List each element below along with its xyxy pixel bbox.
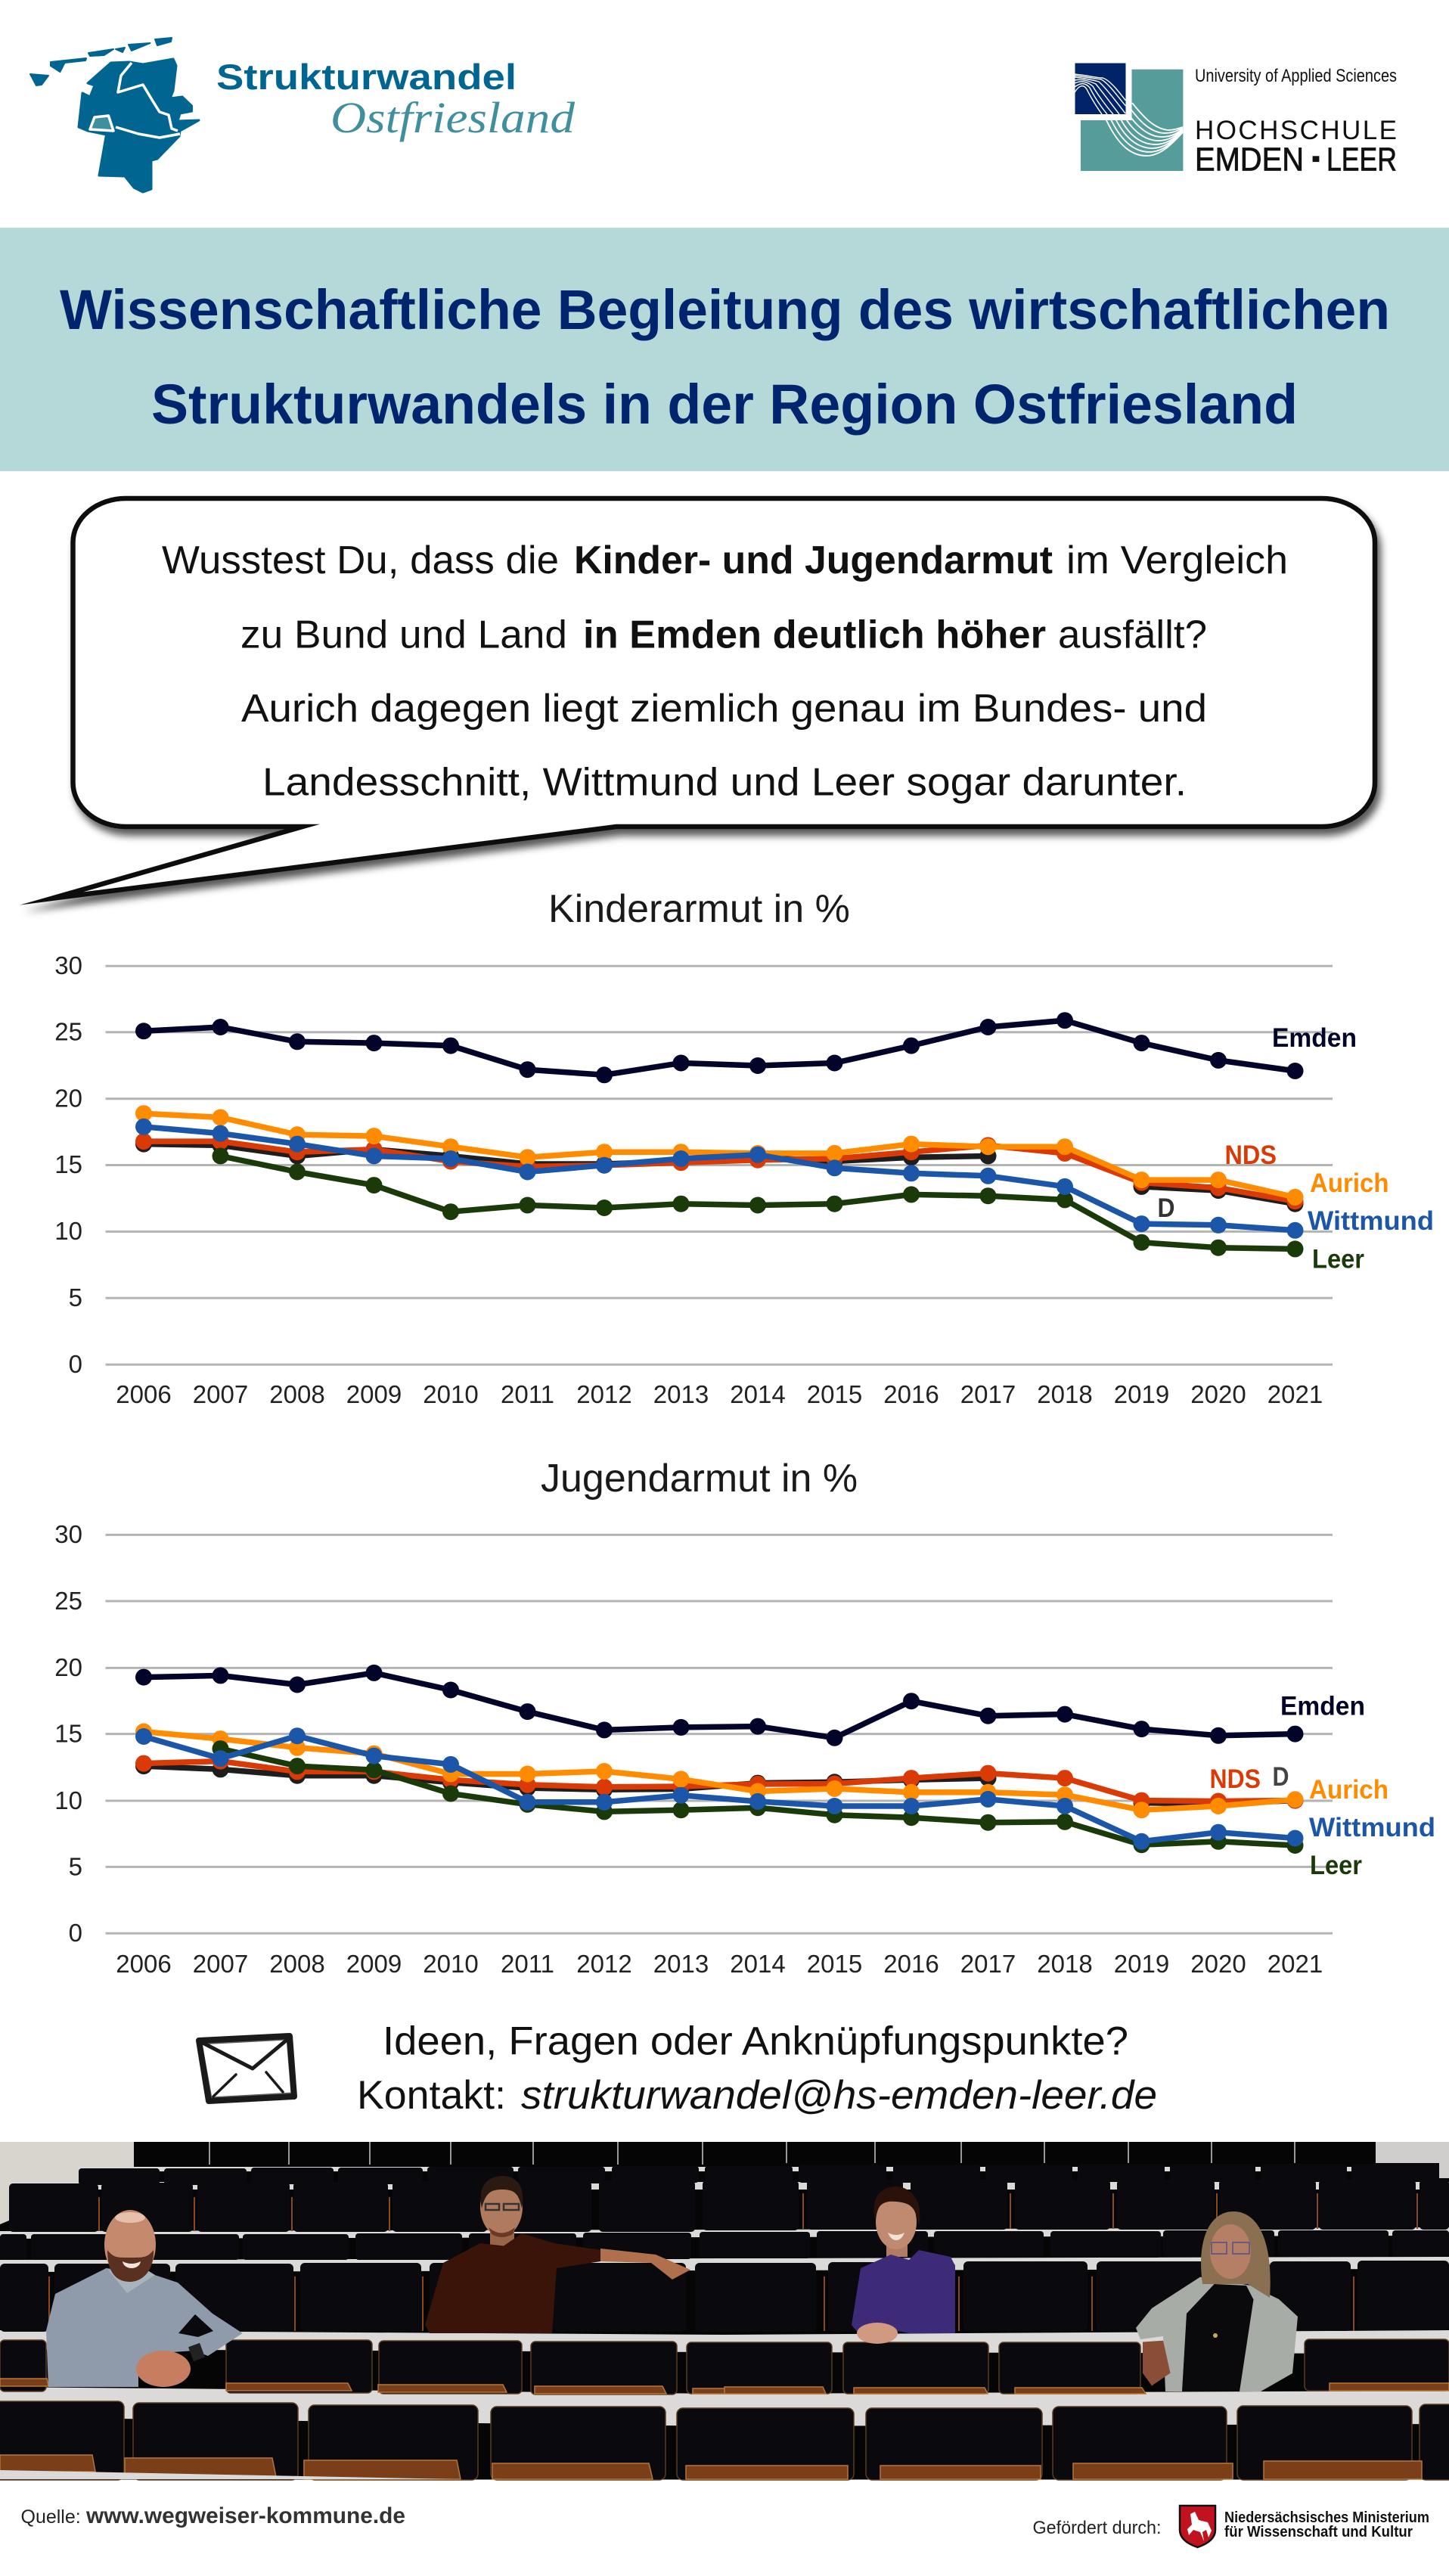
y axis labels: 15 — [54, 1720, 82, 1747]
x axis labels: 2015 — [807, 1950, 862, 1978]
logo line: Hochschule: HOCHSCHULE — [1195, 116, 1397, 145]
series labels: Wittmund — [1308, 1206, 1434, 1236]
chart title: Jugendarmut in % — [541, 1457, 858, 1501]
series labels: Wittmund — [1309, 1813, 1435, 1842]
series labels: D — [1157, 1193, 1175, 1223]
y axis labels — [54, 1520, 82, 1947]
x axis labels: 2007 — [193, 1950, 248, 1978]
y axis labels: 25 — [54, 1587, 82, 1615]
contact email: Kontakt: — [357, 2073, 506, 2118]
icon: envelope — [199, 2036, 294, 2101]
series: NDS — [144, 1761, 1295, 1802]
series labels: D — [1272, 1762, 1289, 1792]
y axis labels: 0 — [69, 1350, 82, 1378]
x axis labels: 2016 — [883, 1950, 939, 1978]
speech bubble callout — [51, 498, 1375, 898]
x axis labels: 2009 — [346, 1950, 402, 1978]
series labels: Leer — [1310, 1851, 1362, 1880]
callout text line 1: im Vergleich — [1066, 538, 1288, 582]
x axis labels — [116, 1380, 1323, 1408]
x axis labels: 2008 — [269, 1950, 325, 1978]
callout text line 1: Wusstest Du, dass die — [162, 538, 559, 582]
x axis labels: 2016 — [883, 1380, 939, 1408]
series labels: Aurich — [1310, 1169, 1388, 1198]
source note: Quelle: — [21, 2506, 81, 2528]
logo wordmark: Strukturwandel — [216, 57, 517, 97]
x axis labels: 2010 — [423, 1380, 479, 1408]
y axis labels: 30 — [54, 1520, 82, 1548]
x axis labels: 2017 — [960, 1380, 1016, 1408]
series labels: Emden — [1280, 1691, 1365, 1721]
ministry name line 2: für Wissenschaft und Kultur — [1224, 2524, 1413, 2540]
logo line: Emden-Leer — [1195, 141, 1397, 178]
y axis labels: 10 — [54, 1217, 82, 1245]
y axis labels: 5 — [69, 1283, 82, 1311]
x axis labels: 2007 — [193, 1380, 248, 1408]
callout text line 2: zu Bund und Land — [240, 613, 567, 656]
y axis labels — [54, 951, 82, 1378]
x axis labels: 2020 — [1190, 1380, 1246, 1408]
x axis labels: 2015 — [807, 1380, 862, 1408]
x axis labels: 2019 — [1114, 1380, 1169, 1408]
series: D — [144, 1144, 1295, 1204]
seats row 4 — [0, 2261, 1449, 2332]
y axis labels: 30 — [54, 951, 82, 979]
logo line: University of Applied Sciences: University of Applied Sciences — [1195, 66, 1397, 86]
x axis labels: 2021 — [1267, 1380, 1323, 1408]
icon: map of Ostfriesland — [30, 38, 199, 192]
logo line: Emden-Leer: LEER — [1326, 141, 1397, 178]
callout text line 2: in Emden deutlich höher — [583, 613, 1046, 656]
x axis labels: 2006 — [116, 1950, 172, 1978]
x axis labels: 2010 — [423, 1950, 479, 1978]
chart: Jugendarmut in % — [54, 1457, 1435, 1978]
x axis labels: 2017 — [960, 1950, 1016, 1978]
series: D — [144, 1766, 1295, 1804]
y axis labels: 0 — [69, 1919, 82, 1947]
logo line: Emden-Leer: EMDEN — [1195, 141, 1304, 178]
x axis labels: 2012 — [576, 1950, 632, 1978]
x axis labels: 2009 — [346, 1380, 402, 1408]
icon: Lower Saxony coat of arms — [1180, 2506, 1215, 2547]
person 2: man in brown sweater — [425, 2176, 690, 2333]
chart: Kinderarmut in % — [54, 887, 1434, 1408]
x axis labels: 2012 — [576, 1380, 632, 1408]
series labels — [1210, 1691, 1435, 1880]
series: Aurich — [144, 1113, 1295, 1197]
series: Emden — [144, 1020, 1295, 1075]
seats row 1 — [79, 2164, 1439, 2185]
funding label: Gefördert durch: — [1033, 2518, 1162, 2538]
callout text line 3: Aurich dagegen liegt ziemlich genau im Bundes- und — [241, 687, 1207, 731]
series labels: Emden — [1272, 1023, 1357, 1053]
source note: www.wegweiser-kommune.de — [85, 2503, 405, 2528]
x axis labels: 2013 — [653, 1950, 709, 1978]
photo: team in lecture hall — [0, 2142, 1449, 2480]
y axis labels: 20 — [54, 1085, 82, 1112]
contact email: strukturwandel@hs-emden-leer.de — [521, 2073, 1157, 2118]
x axis labels: 2006 — [116, 1380, 172, 1408]
x axis labels: 2011 — [501, 1380, 554, 1408]
x axis labels: 2014 — [730, 1950, 786, 1978]
title line 1: Wissenschaftliche Begleitung des wirtschaftlichen — [60, 278, 1390, 341]
series: Leer — [221, 1156, 1295, 1249]
series: Leer — [221, 1749, 1295, 1845]
x axis labels: 2021 — [1267, 1950, 1323, 1978]
seats row 2 — [9, 2180, 1449, 2232]
callout text line 1: Kinder- und Jugendarmut — [574, 538, 1053, 582]
x axis labels: 2013 — [653, 1380, 709, 1408]
person 1: man in grey shirt — [46, 2210, 243, 2387]
y axis labels: 20 — [54, 1653, 82, 1681]
seats row 3 — [0, 2230, 1449, 2260]
title line 2: Strukturwandels in der Region Ostfriesland — [151, 373, 1298, 436]
x axis labels: 2020 — [1190, 1950, 1246, 1978]
series labels: Aurich — [1309, 1775, 1388, 1805]
series: Wittmund — [144, 1127, 1295, 1231]
seats row 5 — [0, 2339, 1449, 2394]
y axis labels: 5 — [69, 1853, 82, 1880]
x axis labels: 2019 — [1114, 1950, 1169, 1978]
series: NDS — [144, 1141, 1295, 1201]
logo script line: Ostfriesland — [330, 93, 576, 142]
logo: Hochschule Emden-Leer — [1075, 63, 1397, 178]
series labels: NDS — [1210, 1764, 1261, 1794]
x axis labels: 2011 — [501, 1950, 554, 1978]
person 4: woman in light cardigan — [1136, 2211, 1298, 2391]
seats row 6 — [0, 2401, 1449, 2480]
person 3: woman in purple sweater — [852, 2186, 955, 2344]
y axis labels: 15 — [54, 1150, 82, 1178]
icon: university mark — [1075, 63, 1183, 171]
x axis labels: 2018 — [1037, 1950, 1093, 1978]
logo: Strukturwandel Ostfriesland — [30, 38, 576, 192]
series labels: NDS — [1225, 1141, 1277, 1170]
ministry name: Niedersächsisches Ministerium — [1224, 2509, 1429, 2526]
title band — [0, 228, 1449, 471]
x axis labels: 2008 — [269, 1380, 325, 1408]
series labels — [1157, 1023, 1434, 1274]
contact block — [199, 2019, 1157, 2118]
x axis labels: 2018 — [1037, 1380, 1093, 1408]
y axis labels: 25 — [54, 1018, 82, 1045]
callout text line 2: ausfällt? — [1058, 613, 1207, 656]
series labels: Leer — [1312, 1245, 1364, 1274]
y axis labels: 10 — [54, 1786, 82, 1814]
series: Wittmund — [144, 1736, 1295, 1842]
contact question: Ideen, Fragen oder Anknüpfungspunkte? — [383, 2019, 1128, 2063]
chart title: Kinderarmut in % — [548, 887, 850, 931]
series: Aurich — [144, 1732, 1295, 1810]
series: Emden — [144, 1673, 1295, 1738]
funding note — [1033, 2506, 1429, 2547]
x axis labels — [116, 1950, 1323, 1978]
callout text line 4: Landesschnitt, Wittmund und Leer sogar darunter. — [262, 761, 1187, 805]
x axis labels: 2014 — [730, 1380, 786, 1408]
